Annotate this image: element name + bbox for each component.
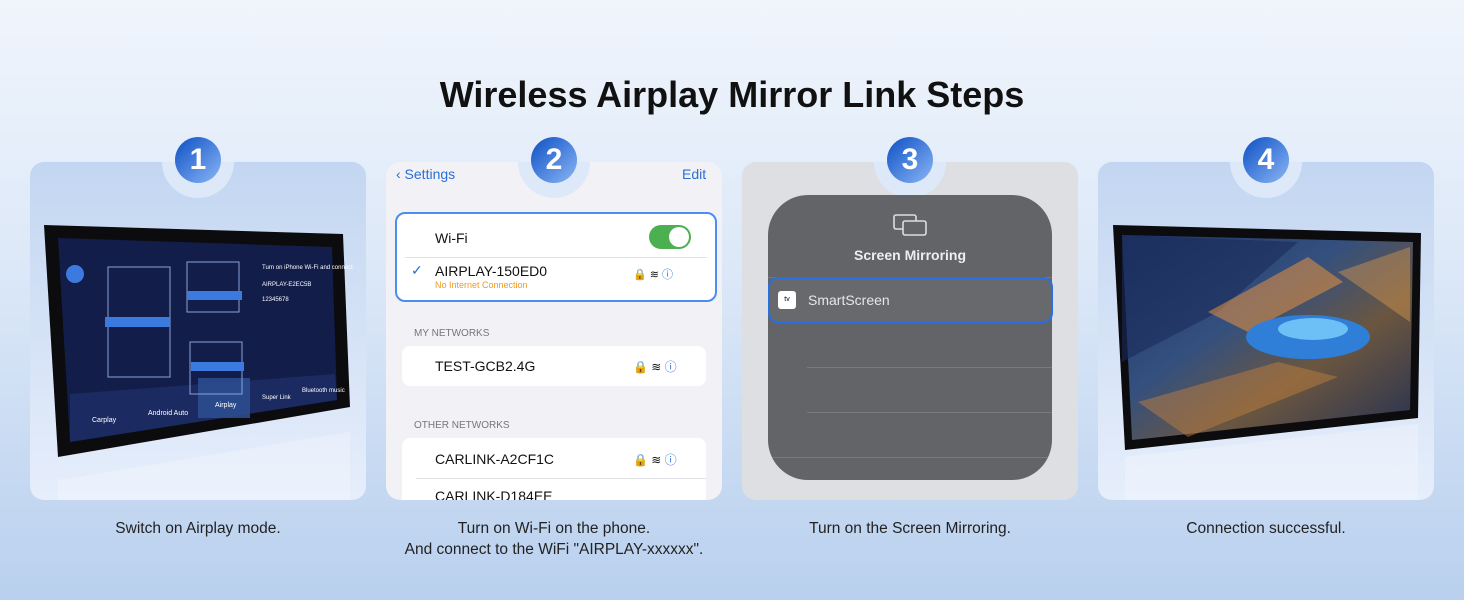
wifi card: AIRPLAY-150ED0	[435, 263, 547, 279]
wifi card: 🔒 ≋ ⓘ	[633, 269, 673, 281]
tablet screen: Carplay	[92, 417, 117, 424]
panel: step 3	[742, 162, 1078, 500]
badge 1: 1	[190, 143, 206, 176]
caption 1: Switch on Airplay mode.	[115, 520, 281, 537]
tablet screen: AIRPLAY-E2EC5B	[262, 282, 311, 288]
panel: step 2: 🔒 ≋ ⓘ	[633, 360, 677, 374]
wifi card	[395, 212, 717, 302]
tablet screen: 12345678	[262, 297, 289, 303]
badge 3: 3	[902, 143, 918, 176]
wifi card: Wi-Fi	[435, 230, 468, 246]
mirroring dialog: Screen Mirroring	[854, 247, 966, 263]
caption 2: Turn on Wi-Fi on the phone.	[458, 520, 650, 537]
badge 4	[1243, 137, 1289, 183]
tablet screen	[44, 225, 353, 457]
wifi card: No Internet Connection	[435, 280, 528, 290]
tablet with car image	[1113, 225, 1421, 450]
tablet screen: Android Auto	[148, 410, 188, 417]
panel: step 2: TEST-GCB2.4G	[435, 358, 535, 374]
badge 3	[887, 137, 933, 183]
tablet screen: Turn on iPhone Wi-Fi and connect	[262, 265, 353, 271]
tablet screen: Airplay	[215, 402, 237, 409]
smartscreen row	[768, 277, 1053, 323]
title: Wireless Airplay Mirror Link Steps	[440, 74, 1024, 115]
tablet screen: Super Link	[262, 395, 292, 401]
badge 1	[175, 137, 221, 183]
wifi card: ✓	[411, 262, 423, 278]
panel: step 2	[386, 162, 722, 500]
caption 2: And connect to the WiFi "AIRPLAY-xxxxxx".	[405, 541, 703, 558]
panel: step 2: CARLINK-A2CF1C	[435, 451, 554, 467]
settings header: ‹ Settings	[396, 166, 455, 182]
tablet screen: Bluetooth music	[302, 388, 345, 394]
smartscreen row: tv	[784, 296, 790, 303]
panel: step 1	[30, 162, 366, 500]
badge 2	[531, 137, 577, 183]
badge 4: 4	[1258, 143, 1274, 176]
smartscreen row: SmartScreen	[808, 292, 890, 308]
caption 2	[404, 520, 703, 558]
badge 2: 2	[546, 143, 562, 176]
panel: step 2: MY NETWORKS	[414, 328, 489, 339]
panel: step 2: Edit	[682, 166, 706, 182]
mirroring dialog	[768, 195, 1052, 480]
panel: step 2: 🔒 ≋ ⓘ	[633, 453, 677, 467]
panel: step 2: OTHER NETWORKS	[414, 420, 510, 431]
panel: step 4	[1098, 162, 1434, 500]
caption 4: Connection successful.	[1186, 520, 1346, 537]
caption 3: Turn on the Screen Mirroring.	[809, 520, 1011, 537]
